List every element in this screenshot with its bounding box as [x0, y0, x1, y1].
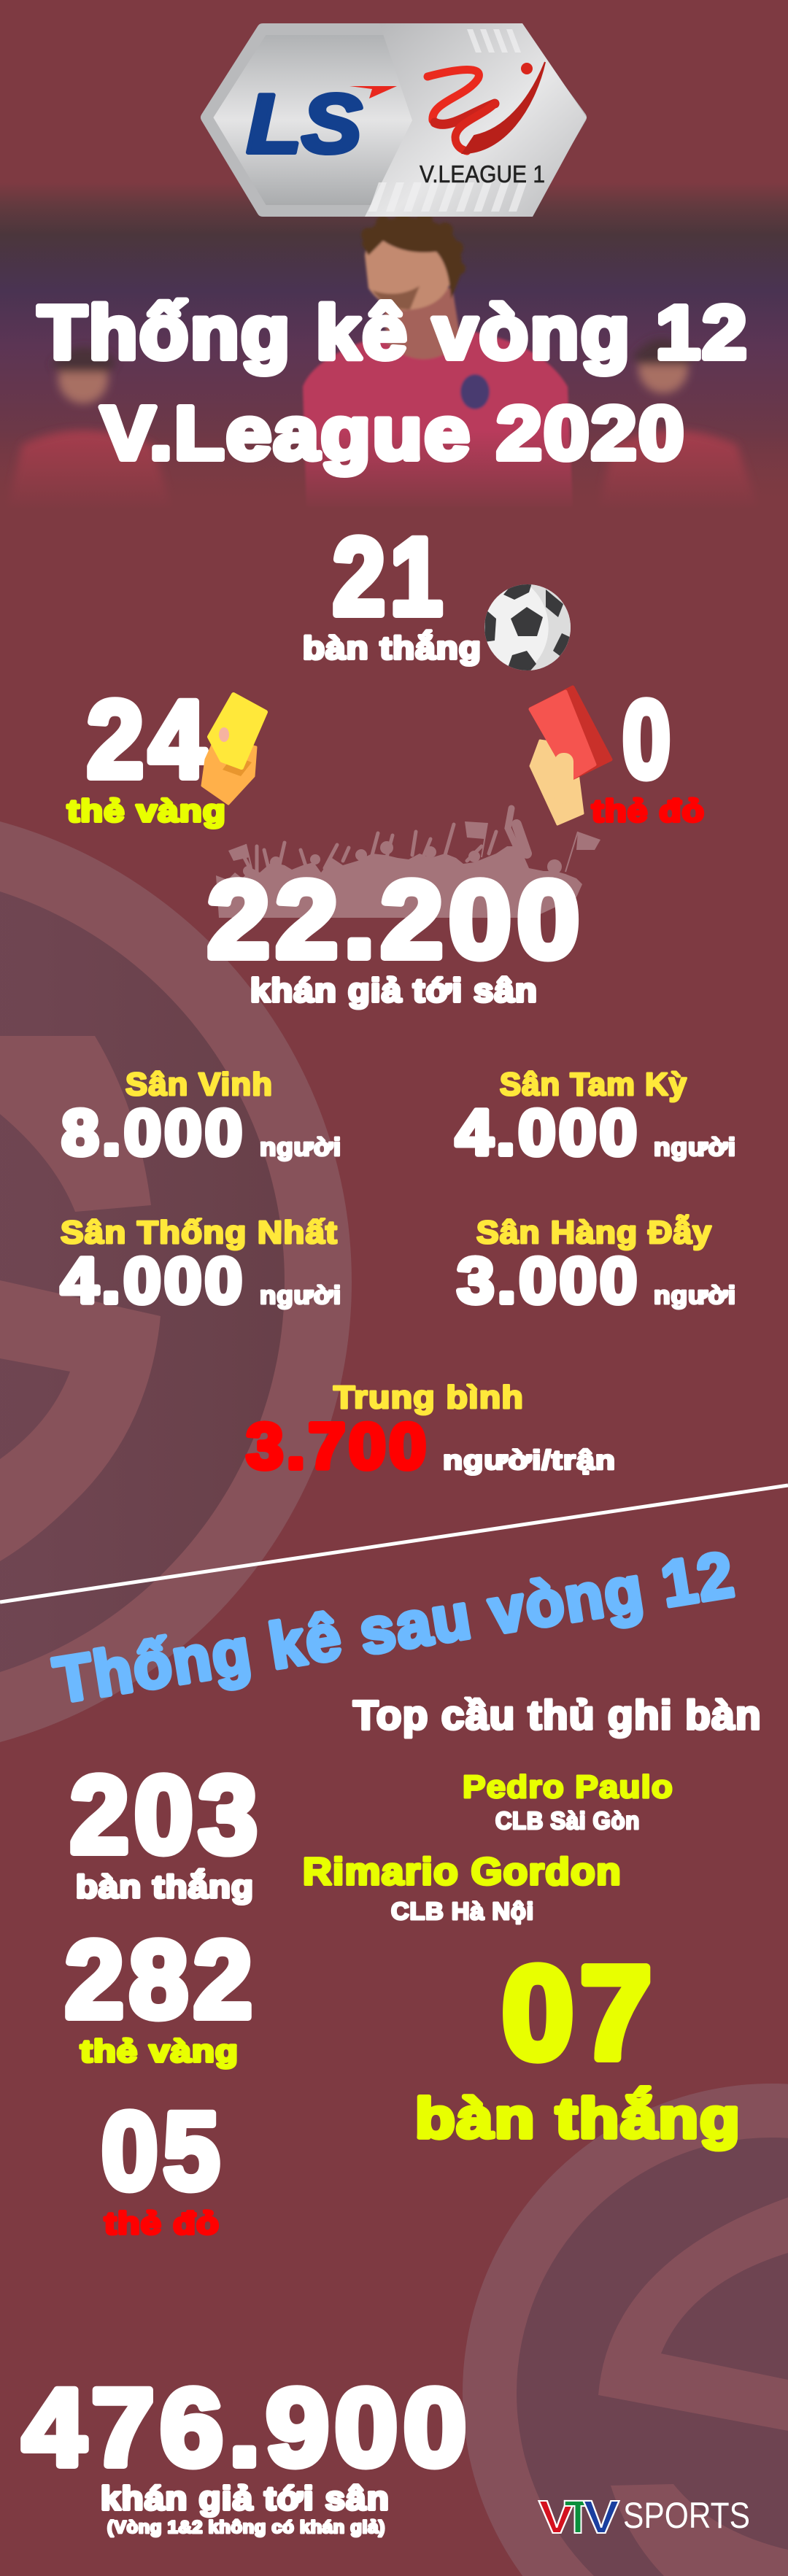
unit: người — [654, 1134, 736, 1161]
scorer club: CLB Sài Gòn — [495, 1807, 640, 1834]
season yellow number: 282 — [65, 1918, 258, 2041]
stadium attendance: 8.000 — [61, 1096, 245, 1169]
season attendance number: 476.900 — [23, 2366, 472, 2488]
average unit: người/trận — [443, 1445, 616, 1475]
heading: top scorers: Top cầu thủ ghi bàn — [353, 1692, 762, 1738]
title line 2: V.League 2020 — [101, 391, 686, 475]
icon: hand holding red card — [530, 687, 611, 824]
stat: attendance this round — [207, 858, 585, 1009]
stadium: Thống Nhất — [61, 1215, 341, 1316]
season goals label: bàn thắng — [76, 1868, 254, 1905]
stat: yellow cards this round — [67, 678, 226, 829]
season stat: red cards — [101, 2089, 225, 2241]
red cards label: thẻ đỏ — [592, 794, 705, 829]
goals number: 21 — [333, 515, 447, 638]
average number: 3.700 — [247, 1409, 429, 1482]
title line 1: Thống kê vòng 12 — [38, 290, 749, 374]
season red number: 05 — [101, 2089, 225, 2212]
section heading: after round 12: Thống kê sau vòng 12 — [49, 1538, 739, 1717]
unit: người — [260, 1282, 341, 1310]
season goals number: 203 — [70, 1753, 263, 1876]
average attendance — [247, 1380, 616, 1482]
stadium attendance: 3.000 — [457, 1245, 641, 1316]
logo text: V.LEAGUE 1: V.LEAGUE 1 — [420, 160, 545, 187]
logo: V.League swoosh mark — [428, 62, 545, 153]
stadium: Vinh — [61, 1067, 341, 1169]
stadium: Tam Kỳ — [455, 1067, 736, 1169]
stadium: Hàng Đẫy — [457, 1214, 736, 1316]
logo: red swoosh accent — [349, 86, 397, 98]
stat: goals this round — [303, 515, 482, 666]
logo text: LS: LS — [247, 78, 362, 171]
scorer name: Pedro Paulo — [463, 1769, 673, 1805]
attendance label: khán giả tới sân — [250, 972, 538, 1009]
goals label: bàn thắng — [415, 2086, 741, 2150]
stadium attendance: 4.000 — [61, 1245, 245, 1316]
watermark: club crest lower right — [463, 2084, 788, 2576]
top scorer goals — [415, 1940, 741, 2150]
VTV mark: V — [538, 2491, 575, 2543]
VTV mark: T — [564, 2491, 592, 2543]
yellow cards label: thẻ vàng — [67, 794, 226, 829]
scorer: Rimario Gordon — [303, 1851, 622, 1925]
season attendance label: khán giả tới sân — [101, 2480, 390, 2517]
average label: Trung bình — [333, 1380, 524, 1415]
red cards number: 0 — [622, 678, 675, 800]
VTV mark — [538, 2491, 619, 2543]
season yellow label: thẻ vàng — [80, 2034, 239, 2069]
watermark: club crest upper left — [0, 805, 352, 1759]
logo: VTV Sports — [538, 2491, 750, 2543]
season red label: thẻ đỏ — [104, 2206, 220, 2241]
season attendance note: (Vòng 1&2 không có khán giả) — [107, 2518, 385, 2537]
attendance number: 22.200 — [207, 858, 585, 980]
stadium name: Sân Tam Kỳ — [500, 1067, 687, 1102]
unit: người — [260, 1134, 341, 1161]
stadium name: Sân Thống Nhất — [61, 1215, 338, 1250]
season stat: attendance — [23, 2366, 472, 2537]
stadium attendance: 4.000 — [455, 1096, 641, 1169]
scorer: Pedro Paulo — [463, 1769, 673, 1834]
goals label: bàn thắng — [303, 630, 482, 666]
icon: football — [484, 584, 571, 670]
yellow cards number: 24 — [87, 678, 211, 800]
icon: hand holding yellow card — [202, 695, 266, 804]
stadium name: Sân Vinh — [125, 1067, 273, 1102]
unit: người — [654, 1282, 736, 1310]
crowd silhouette — [216, 808, 600, 918]
logo: LS V.League 1 badge — [206, 23, 587, 217]
SPORTS wordmark: SPORTS — [623, 2495, 750, 2536]
VTV mark: V — [583, 2491, 619, 2543]
season stat: goals — [70, 1753, 263, 1905]
scorer club: CLB Hà Nội — [391, 1898, 534, 1925]
photo: player celebrating — [0, 182, 788, 532]
goals count: 07 — [502, 1940, 658, 2086]
stat: red cards this round — [592, 678, 705, 829]
scorer name: Rimario Gordon — [303, 1851, 622, 1893]
stadium name: Sân Hàng Đẫy — [476, 1214, 712, 1250]
season stat: yellow cards — [65, 1918, 258, 2069]
